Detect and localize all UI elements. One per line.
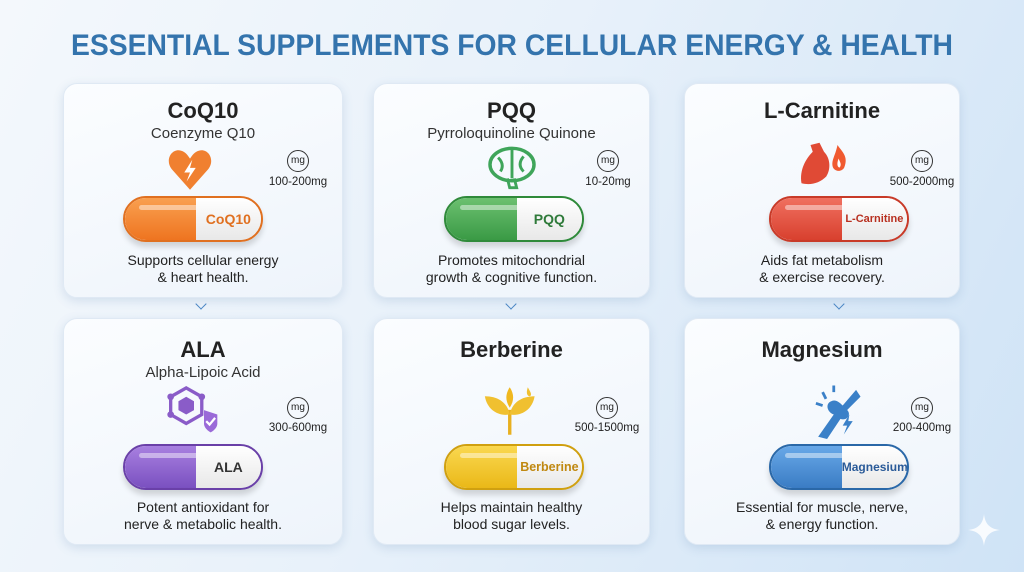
capsule: L-Carnitine bbox=[845, 213, 903, 225]
icon: brain bbox=[488, 146, 536, 190]
capsule bbox=[444, 196, 584, 242]
dose bbox=[269, 150, 327, 188]
panel: L-Carnitine: mg bbox=[915, 155, 929, 166]
dose bbox=[890, 150, 954, 188]
heading: PQQ bbox=[487, 98, 536, 123]
description: blood sugar levels. bbox=[453, 516, 570, 532]
subtitle: Coenzyme Q10 bbox=[151, 125, 255, 142]
panel: ALA: 300-600mg bbox=[269, 422, 327, 434]
capsule bbox=[123, 196, 263, 242]
description bbox=[128, 252, 278, 285]
subtitle: Pyrroloquinoline Quinone bbox=[427, 125, 596, 142]
panel: PQQ: 10-20mg bbox=[585, 176, 631, 188]
heading: L-Carnitine bbox=[764, 98, 880, 123]
description bbox=[736, 499, 908, 532]
dose bbox=[893, 397, 951, 434]
panel: L-Carnitine: 500-2000mg bbox=[890, 176, 954, 188]
description: Supports cellular energy bbox=[128, 252, 278, 268]
description: & heart health. bbox=[157, 269, 249, 285]
icon: heart bbox=[168, 150, 212, 190]
panel: PQQ bbox=[373, 83, 650, 298]
panel: Magnesium bbox=[684, 318, 960, 545]
arrow bbox=[833, 298, 845, 310]
title: ESSENTIAL SUPPLEMENTS FOR CELLULAR ENERGY & HEALTH bbox=[71, 29, 953, 62]
description: Potent antioxidant for bbox=[137, 499, 269, 515]
description: growth & cognitive function. bbox=[426, 269, 597, 285]
panel: CoQ10: 100-200mg bbox=[269, 176, 327, 188]
description: & energy function. bbox=[766, 516, 878, 532]
description bbox=[124, 499, 282, 532]
panel: ALA: mg bbox=[291, 402, 305, 413]
icon: joint bbox=[816, 386, 860, 439]
panel: Magnesium: mg bbox=[915, 402, 929, 413]
dose bbox=[585, 150, 631, 188]
capsule: Magnesium bbox=[842, 460, 908, 474]
icon: plant bbox=[484, 387, 535, 435]
panel: Berberine: mg bbox=[600, 402, 614, 413]
description: Promotes mitochondrial bbox=[438, 252, 585, 268]
description: & exercise recovery. bbox=[759, 269, 885, 285]
capsule: PQQ bbox=[534, 211, 565, 227]
dose bbox=[575, 397, 639, 434]
description bbox=[441, 499, 582, 532]
heading: Berberine bbox=[460, 337, 563, 362]
description: Helps maintain healthy bbox=[441, 499, 582, 515]
arrow bbox=[195, 298, 207, 310]
description bbox=[759, 252, 885, 285]
description: Aids fat metabolism bbox=[761, 252, 883, 268]
icon: muscle flame bbox=[801, 142, 846, 184]
panel: L-Carnitine bbox=[684, 83, 960, 298]
panel: Berberine: 500-1500mg bbox=[575, 422, 639, 434]
capsule bbox=[769, 196, 909, 242]
description bbox=[426, 252, 597, 285]
heading: ALA bbox=[180, 337, 226, 362]
panel: Berberine bbox=[373, 318, 650, 545]
panel: PQQ: mg bbox=[601, 155, 615, 166]
description: nerve & metabolic health. bbox=[124, 516, 282, 532]
dose bbox=[269, 397, 327, 434]
icon: molecule shield bbox=[167, 386, 218, 432]
description: Essential for muscle, nerve, bbox=[736, 499, 908, 515]
arrow bbox=[505, 298, 517, 310]
panel: ALA bbox=[63, 318, 343, 545]
subtitle: Alpha-Lipoic Acid bbox=[145, 364, 261, 381]
capsule bbox=[123, 444, 263, 490]
heading: CoQ10 bbox=[168, 98, 238, 123]
heading: Magnesium bbox=[761, 337, 883, 362]
capsule bbox=[769, 444, 909, 490]
icon: sparkle bbox=[969, 515, 999, 546]
capsule: CoQ10 bbox=[206, 211, 251, 227]
capsule: ALA bbox=[214, 459, 243, 475]
panel: CoQ10 bbox=[63, 83, 343, 298]
panel: Magnesium: 200-400mg bbox=[893, 422, 951, 434]
panel: CoQ10: mg bbox=[291, 155, 305, 166]
capsule bbox=[444, 444, 584, 490]
capsule: Berberine bbox=[520, 460, 579, 474]
